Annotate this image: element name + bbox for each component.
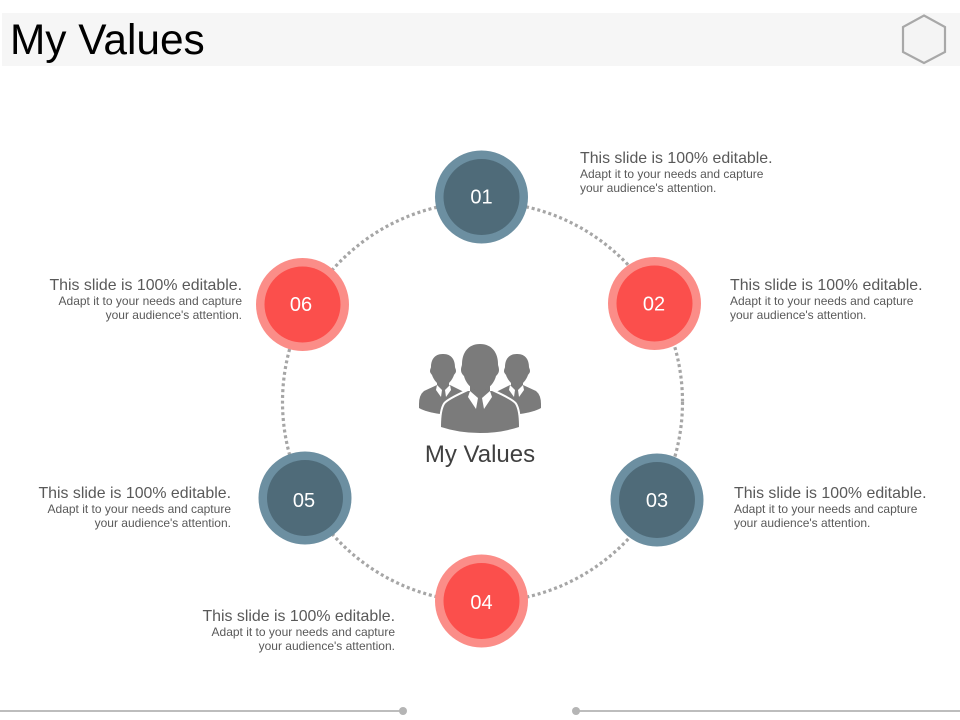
right person	[490, 354, 541, 415]
text block 04: This slide is 100% editable.	[202, 608, 395, 625]
node 04: 04	[470, 592, 493, 614]
text block 05: This slide is 100% editable.	[38, 485, 231, 502]
node 03	[610, 454, 704, 546]
text block 01	[580, 150, 773, 195]
text block 02: This slide is 100% editable.	[730, 277, 923, 294]
icon: group of people	[419, 344, 541, 433]
text block 04: Adapt it to your needs and capture	[212, 625, 395, 639]
node 02: 02	[643, 294, 665, 316]
node 03: 03	[646, 490, 668, 512]
text block 02: your audience's attention.	[730, 308, 866, 322]
text block 02: Adapt it to your needs and capture	[730, 294, 913, 308]
text block 03	[734, 485, 927, 530]
text block 05: your audience's attention.	[95, 516, 231, 530]
text block 06: This slide is 100% editable.	[49, 277, 242, 294]
collars	[436, 385, 524, 409]
centre label: My Values	[425, 441, 535, 468]
text block 06	[49, 277, 242, 322]
left person	[419, 354, 470, 415]
text block 01: your audience's attention.	[580, 181, 716, 195]
node 02	[608, 257, 701, 350]
icon: hexagon	[902, 14, 946, 64]
node 06: 06	[290, 294, 312, 316]
text block 06: Adapt it to your needs and capture	[59, 294, 242, 308]
node 01: 01	[470, 186, 493, 208]
text block 02	[730, 277, 923, 322]
text block 01: This slide is 100% editable.	[580, 150, 773, 167]
footer left line	[0, 707, 407, 715]
node 01	[435, 150, 528, 244]
footer right line	[572, 707, 960, 715]
text block 04: your audience's attention.	[259, 639, 395, 653]
node 06	[256, 258, 349, 351]
text block 03: This slide is 100% editable.	[734, 485, 927, 502]
text block 01: Adapt it to your needs and capture	[580, 167, 763, 181]
text block 03: your audience's attention.	[734, 516, 870, 530]
title: My Values	[10, 16, 205, 63]
header band	[2, 13, 960, 66]
text block 03: Adapt it to your needs and capture	[734, 502, 917, 516]
node 05: 05	[293, 490, 315, 512]
node 05	[258, 452, 352, 544]
centre person	[441, 344, 519, 433]
text block 05: Adapt it to your needs and capture	[48, 502, 231, 516]
text block 04	[202, 608, 395, 653]
text block 06: your audience's attention.	[106, 308, 242, 322]
node 04	[435, 554, 528, 648]
text block 05	[38, 485, 231, 530]
